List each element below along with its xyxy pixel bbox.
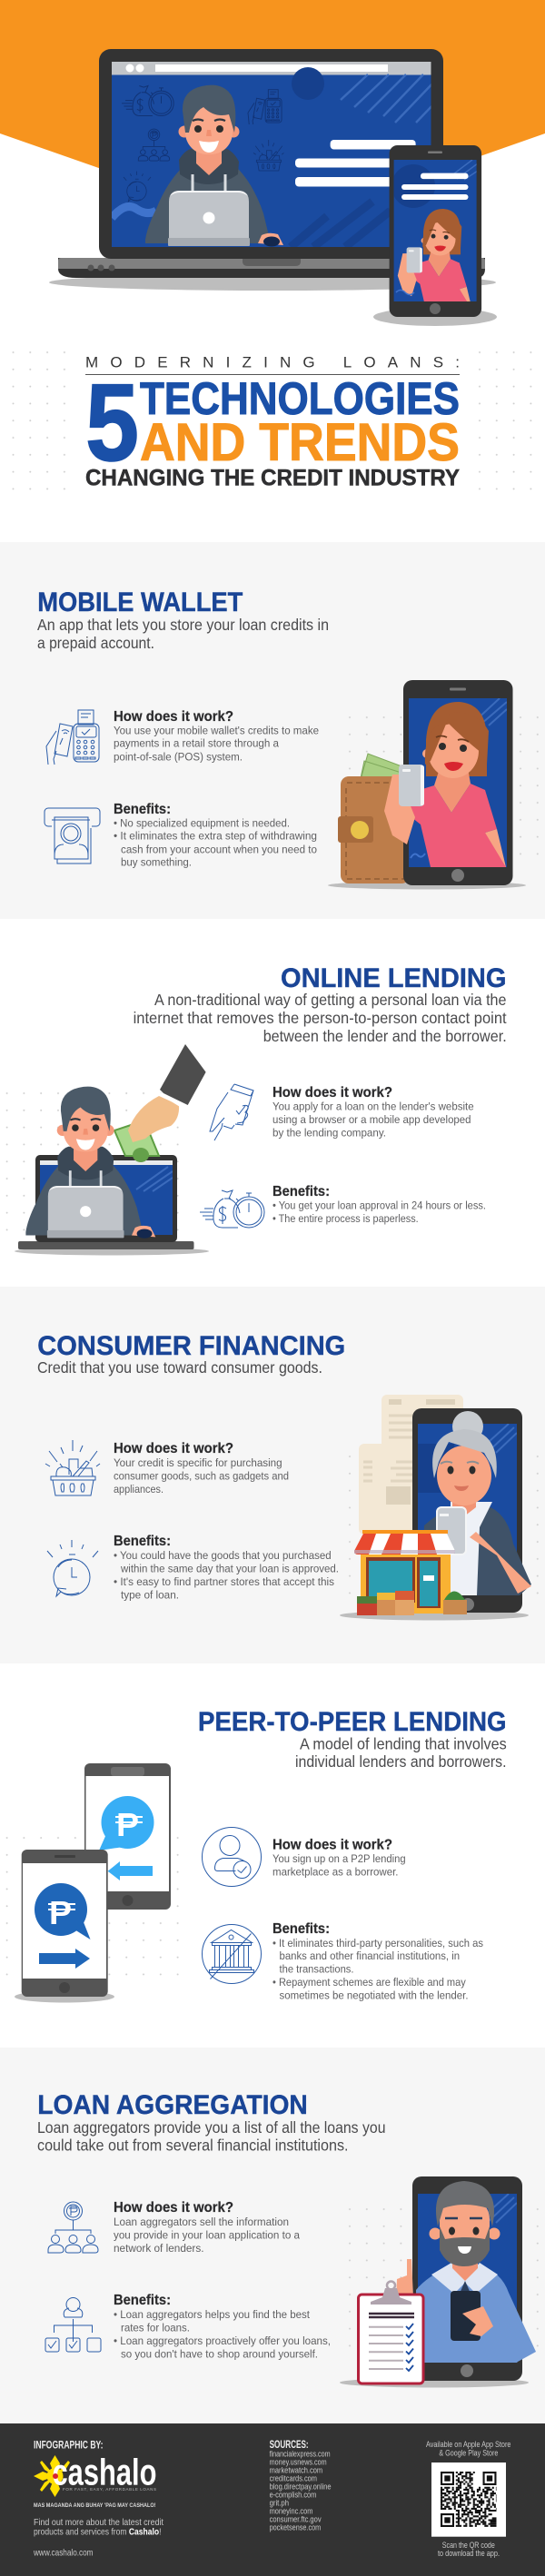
how it works: You sign up on a P2P lending bbox=[272, 1852, 406, 1865]
how it works: payments in a retail store through a bbox=[114, 737, 279, 750]
QR caption bbox=[438, 2540, 500, 2558]
description: A model of lending that involves bbox=[300, 1735, 507, 1753]
illustration: phone, receipts and store bbox=[340, 1395, 540, 1620]
benefits: • You get your loan approval in 24 hours or less. bbox=[272, 1199, 486, 1212]
how it works bbox=[114, 2200, 300, 2255]
icon: person with checkboxes bbox=[45, 2297, 101, 2352]
how it works: network of lenders. bbox=[114, 2242, 203, 2255]
benefits: type of loan. bbox=[121, 1588, 179, 1601]
description bbox=[134, 991, 507, 1045]
description bbox=[37, 616, 329, 652]
icon: POS terminal bbox=[46, 710, 99, 765]
front phone bbox=[22, 1850, 108, 1997]
description: Loan aggregators provide you a list of all the loans you bbox=[37, 2118, 385, 2137]
logo sun bbox=[34, 2455, 70, 2497]
man at laptop bbox=[145, 85, 283, 247]
benefits: • It eliminates third-party personalities, such as bbox=[272, 1937, 483, 1949]
receipts bbox=[359, 1395, 463, 1535]
woman with phone bbox=[384, 702, 506, 867]
about text bbox=[33, 2517, 164, 2559]
benefits: Benefits: bbox=[114, 1534, 171, 1549]
icon: hand holding phone bbox=[210, 1084, 253, 1140]
laptop illustration bbox=[49, 49, 496, 291]
benefits: Benefits: bbox=[272, 1921, 330, 1937]
benefits: within the same day that your loan is approved. bbox=[120, 1563, 339, 1575]
arm handing money bbox=[128, 1096, 179, 1142]
tagline: MAS MAGANDA ANG BUHAY 'PAG MAY CASHALO! bbox=[34, 2503, 156, 2509]
front phone: P bbox=[49, 1894, 72, 1931]
icon: money bag and stopwatch bbox=[200, 1190, 264, 1228]
how it works: you provide in your loan application to a bbox=[114, 2229, 300, 2242]
icon: verified user bbox=[202, 1827, 262, 1887]
description: A non-traditional way of getting a personal loan via the bbox=[154, 991, 507, 1009]
description: could take out from several financial institutions. bbox=[37, 2137, 349, 2155]
sources: marketwatch.com bbox=[270, 2465, 322, 2475]
about text: Find out more about the latest credit bbox=[34, 2517, 164, 2528]
how it works: How does it work? bbox=[272, 1085, 392, 1100]
sources bbox=[270, 2438, 332, 2532]
clipboard bbox=[358, 2281, 423, 2384]
panel: footer bbox=[0, 2423, 545, 2576]
app availability bbox=[426, 2439, 510, 2457]
app availability: Available on Apple App Store bbox=[426, 2439, 510, 2449]
benefits: banks and other financial institutions, in bbox=[280, 1949, 460, 1962]
how it works: How does it work? bbox=[114, 709, 233, 725]
panel: online lending bbox=[5, 968, 507, 1255]
store bbox=[354, 1530, 467, 1615]
benefits bbox=[272, 1921, 483, 2002]
description: between the lender and the borrower. bbox=[263, 1027, 507, 1045]
benefits: • Repayment schemes are flexible and may bbox=[272, 1976, 467, 1989]
QR caption: to download the app. bbox=[438, 2548, 500, 2558]
logo: cashalo: cashalo bbox=[53, 2452, 156, 2493]
title: TECHNOLOGIES bbox=[140, 373, 460, 424]
how it works: You use your mobile wallet's credits to make bbox=[114, 724, 319, 736]
title: AND TRENDS bbox=[140, 413, 460, 472]
benefits: Benefits: bbox=[114, 2293, 171, 2308]
how it works: How does it work? bbox=[114, 1441, 233, 1456]
benefits: sometimes be negotiated with the lender. bbox=[280, 1989, 469, 2002]
title: MODERNIZING LOANS: bbox=[85, 354, 460, 370]
description: a prepaid account. bbox=[37, 634, 154, 652]
back phone: P bbox=[116, 1806, 139, 1843]
description bbox=[295, 1735, 507, 1771]
phone with woman bbox=[373, 145, 497, 326]
orange banner bbox=[0, 0, 545, 229]
heading: LOAN AGGREGATION bbox=[37, 2090, 308, 2120]
benefits: cash from your account when you need to bbox=[121, 843, 317, 855]
how it works: How does it work? bbox=[272, 1838, 392, 1853]
benefits: • Loan aggregators helps you find the best bbox=[114, 2308, 311, 2321]
elderly woman bbox=[422, 1411, 531, 1595]
how it works bbox=[114, 1441, 289, 1495]
how it works: consumer goods, such as gadgets and bbox=[114, 1470, 289, 1483]
logo: cashalo bbox=[34, 2452, 156, 2497]
infographic by: INFOGRAPHIC BY: bbox=[34, 2441, 104, 2452]
panel: peer-to-peer lending bbox=[0, 1663, 545, 2048]
sources: creditcards.com bbox=[270, 2473, 317, 2483]
icon: shopping basket bbox=[45, 1440, 100, 1495]
icon: cash dispenser bbox=[45, 808, 100, 864]
benefits bbox=[114, 802, 317, 869]
panel: mobile wallet bbox=[0, 542, 545, 919]
app availability: & Google Play Store bbox=[439, 2447, 498, 2457]
heading: ONLINE LENDING bbox=[281, 963, 507, 993]
title bbox=[85, 354, 460, 491]
benefits bbox=[114, 1534, 339, 1601]
benefits: • You could have the goods that you purchased bbox=[114, 1549, 332, 1562]
sources: SOURCES: bbox=[270, 2438, 309, 2451]
benefits: Benefits: bbox=[114, 802, 171, 817]
heading: MOBILE WALLET bbox=[37, 587, 243, 617]
sources: pocketsense.com bbox=[270, 2522, 321, 2532]
how it works bbox=[114, 709, 319, 763]
man bbox=[396, 2181, 536, 2363]
heading: PEER-TO-PEER LENDING bbox=[198, 1707, 507, 1737]
description: individual lenders and borrowers. bbox=[295, 1752, 507, 1771]
how it works: Loan aggregators sell the information bbox=[114, 2216, 289, 2228]
description bbox=[37, 2118, 385, 2155]
sources: e-complish.com bbox=[270, 2490, 316, 2500]
benefits: • It's easy to find partner stores that accept this bbox=[114, 1575, 334, 1588]
description: Credit that you use toward consumer goods. bbox=[37, 1358, 322, 1377]
sources: consumer.ftc.gov bbox=[270, 2514, 322, 2524]
panel: consumer financing bbox=[0, 1287, 545, 1663]
icon: lender network bbox=[48, 2202, 98, 2253]
description: internet that removes the person-to-person contact point bbox=[134, 1009, 507, 1027]
how it works: by the lending company. bbox=[272, 1127, 386, 1140]
icon: crossed-out bank bbox=[202, 1925, 262, 1983]
illustration: two phones bbox=[5, 1763, 180, 2003]
about text: products and services from Cashalo! bbox=[34, 2527, 162, 2538]
benefits: • No specialized equipment is needed. bbox=[114, 816, 290, 829]
man at laptop bbox=[25, 1087, 155, 1239]
QR code bbox=[431, 2462, 506, 2537]
how it works bbox=[272, 1085, 474, 1140]
benefits: • The entire process is paperless. bbox=[272, 1212, 419, 1225]
illustration: man receiving money bbox=[5, 1044, 209, 1255]
benefits: the transactions. bbox=[280, 1963, 354, 1976]
sources: moneyinc.com bbox=[270, 2506, 313, 2516]
how it works: appliances. bbox=[114, 1483, 164, 1495]
about text: www.cashalo.com bbox=[33, 2548, 94, 2559]
logo: cashalo: FOR FAST, EASY, AFFORDABLE LOANS bbox=[63, 2487, 156, 2492]
panel: loan aggregation bbox=[0, 2048, 545, 2423]
benefits: rates for loans. bbox=[121, 2321, 190, 2334]
dotted pattern left bbox=[12, 351, 66, 492]
description: An app that lets you store your loan credits in bbox=[37, 616, 329, 634]
benefits: buy something. bbox=[121, 856, 192, 869]
dotted pattern right bbox=[479, 351, 533, 492]
benefits bbox=[272, 1184, 486, 1225]
how it works bbox=[272, 1838, 406, 1879]
how it works: You apply for a loan on the lender's website bbox=[272, 1100, 474, 1113]
how it works: point-of-sale (POS) system. bbox=[114, 750, 243, 763]
heading: CONSUMER FINANCING bbox=[37, 1331, 345, 1361]
laptop screen decoration bbox=[112, 67, 436, 247]
sources: financialexpress.com bbox=[270, 2448, 331, 2458]
sources: money.usnews.com bbox=[270, 2457, 327, 2467]
benefits bbox=[114, 2293, 331, 2360]
icon: clock bbox=[47, 1540, 98, 1596]
title: CHANGING THE CREDIT INDUSTRY bbox=[85, 466, 460, 491]
panel: hero header bbox=[0, 0, 545, 542]
benefits: Benefits: bbox=[272, 1184, 330, 1199]
title: 5 bbox=[85, 360, 139, 484]
benefits: so you don't have to shop around yourself. bbox=[121, 2347, 318, 2360]
sources: grit.ph bbox=[270, 2498, 289, 2508]
benefits: • It eliminates the extra step of withdrawing bbox=[114, 830, 317, 843]
how it works: Your credit is specific for purchasing bbox=[114, 1456, 282, 1469]
back phone bbox=[84, 1763, 171, 1910]
benefits: • Loan aggregators proactively offer you loans, bbox=[114, 2334, 331, 2347]
illustration: man with phone and clipboard bbox=[340, 2176, 540, 2388]
illustration: phone and wallet bbox=[328, 680, 540, 890]
how it works: How does it work? bbox=[114, 2200, 233, 2216]
how it works: using a browser or a mobile app developed bbox=[272, 1113, 471, 1126]
QR caption: Scan the QR code bbox=[442, 2540, 495, 2550]
how it works: marketplace as a borrower. bbox=[272, 1866, 398, 1879]
sources: blog.directpay.online bbox=[270, 2482, 332, 2492]
